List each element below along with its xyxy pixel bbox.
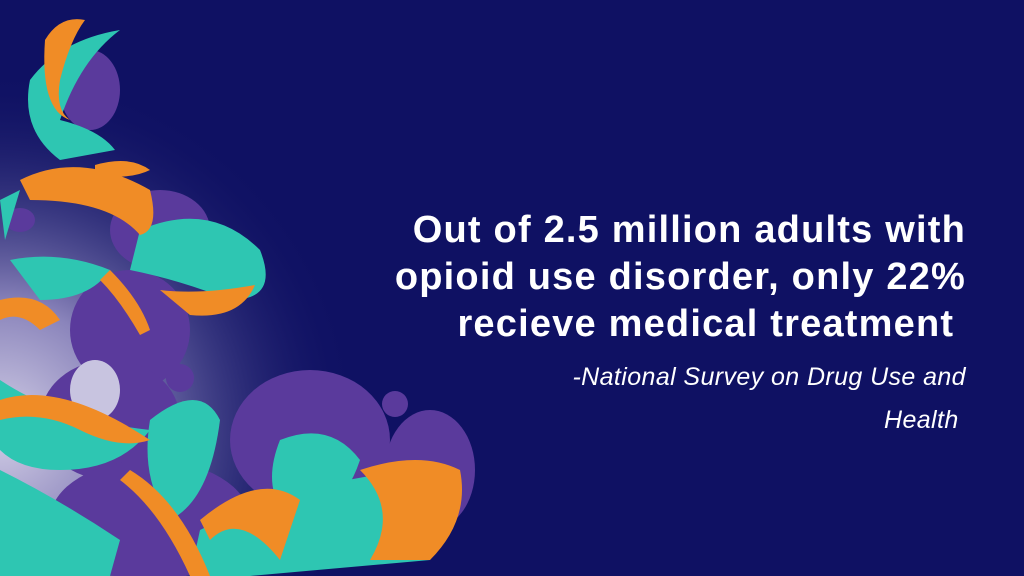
headline <box>395 209 966 345</box>
decorative light blobs <box>70 360 120 420</box>
decorative orange ribbons <box>0 19 462 576</box>
source citation: Health <box>884 406 959 434</box>
source citation <box>572 363 966 434</box>
source citation: -National Survey on Drug Use and <box>572 363 966 391</box>
headline: Out of 2.5 million adults with <box>413 209 966 251</box>
headline: recieve medical treatment <box>457 303 954 345</box>
decorative purple blobs <box>5 50 475 576</box>
decorative teal ribbons <box>0 30 443 576</box>
headline: opioid use disorder, only 22% <box>395 256 966 298</box>
